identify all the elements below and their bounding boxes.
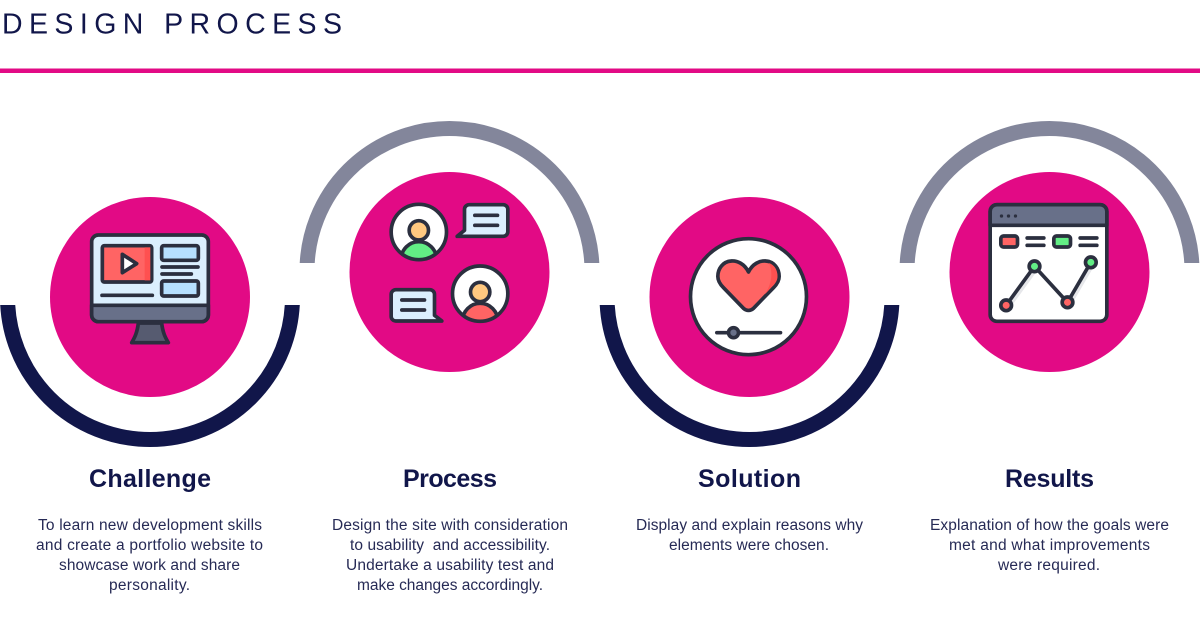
header rule — [0, 68, 1200, 73]
title: DESIGN PROCESS — [2, 8, 342, 40]
text: process — [332, 517, 568, 594]
text: solution: elements were chosen. — [669, 537, 829, 554]
text: process: Undertake a usability test and — [346, 557, 554, 574]
icon: monitor stand — [132, 323, 168, 343]
icon: slider — [717, 328, 780, 338]
heading: results: Results — [1005, 465, 1094, 493]
panel: process icon — [350, 172, 549, 372]
text: results: Explanation of how the goals were — [930, 517, 1169, 534]
icon: browser window — [990, 205, 1107, 321]
panel: results icon — [950, 172, 1149, 372]
text: solution: Display and explain reasons why — [636, 517, 863, 534]
icon: monitor — [92, 235, 208, 322]
icon: speech bubble right — [457, 205, 508, 236]
arc: results — [900, 121, 1200, 263]
heading: process: Process — [403, 465, 497, 493]
text: challenge: personality. — [109, 577, 190, 594]
arc: solution — [600, 305, 900, 447]
text: results — [930, 517, 1169, 574]
arc: process — [300, 121, 600, 263]
text: results: were required. — [997, 557, 1100, 574]
text: challenge — [36, 517, 263, 594]
text: solution — [636, 517, 863, 554]
icon: heart — [718, 261, 779, 310]
panel: challenge icon — [50, 197, 250, 397]
text: process: to usability and accessibility. — [350, 537, 550, 554]
text: process: Design the site with consideration — [332, 517, 568, 534]
heading: challenge: Challenge — [89, 465, 211, 493]
text: process: make changes accordingly. — [357, 577, 543, 594]
arc: challenge — [0, 305, 300, 447]
heading: solution: Solution — [698, 465, 801, 493]
text: challenge: To learn new development skills — [38, 517, 262, 534]
panel: solution icon — [650, 197, 849, 397]
icon: person green — [389, 202, 448, 262]
icon: person red — [450, 264, 510, 324]
text: challenge: and create a portfolio website to — [36, 537, 263, 554]
line chart — [1001, 257, 1096, 311]
icon: video circle — [690, 239, 806, 355]
icon: speech bubble left — [391, 290, 442, 321]
text: results: met and what improvements — [949, 537, 1150, 554]
text: challenge: showcase work and share — [59, 557, 240, 574]
